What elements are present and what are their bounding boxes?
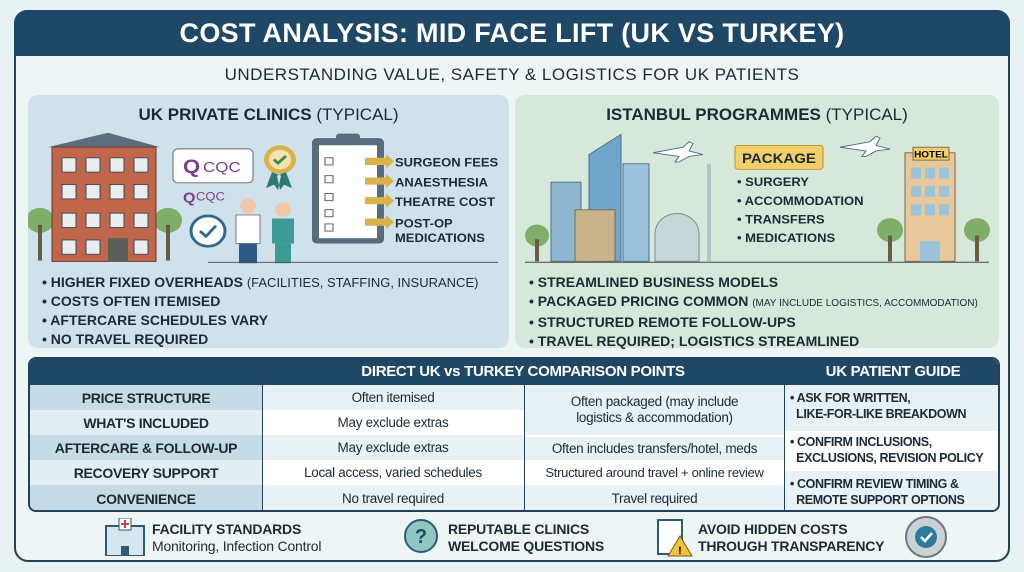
illustration: UK clinic building, CQC, staff, checklist: THEATRE COST (395, 196, 496, 209)
comparison table: EXCLUSIONS, REVISION POLICY (796, 451, 983, 465)
bullets: UK: NO TRAVEL REQUIRED (51, 331, 208, 347)
comparison table: DIRECT UK vs TURKEY COMPARISON POINTS (361, 363, 685, 380)
comparison table: RECOVERY SUPPORT (74, 464, 218, 480)
comparison table: WHAT'S INCLUDED (83, 414, 209, 430)
icon: clipboard warning: ! (678, 545, 682, 557)
icon: certified seal (905, 516, 947, 558)
footer: reputable clinics: REPUTABLE CLINICS (448, 521, 589, 537)
comparison table: May exclude extras (338, 414, 448, 430)
comparison table: Structured around travel + online review (545, 464, 764, 480)
footer: avoid hidden costs (657, 516, 947, 558)
bullets: UK: HIGHER FIXED OVERHEADS (FACILITIES, STAFFING, INSURANCE) (51, 274, 478, 290)
illustration: UK clinic building, CQC, staff, checklist: Q (183, 156, 200, 178)
comparison table: PRICE STRUCTURE (82, 390, 210, 406)
comparison table: Travel required (612, 490, 697, 506)
illustration: city skyline, package, hotel, planes: HOTEL (914, 150, 948, 160)
comparison table: No travel required (342, 490, 444, 506)
comparison table (28, 357, 1000, 512)
comparison table: May exclude extras (338, 440, 448, 454)
comparison table: AFTERCARE & FOLLOW-UP (55, 440, 237, 456)
comparison table: Often includes transfers/hotel, meds (552, 440, 757, 456)
comparison table: CONVENIENCE (96, 490, 196, 506)
bullets: Istanbul: TRAVEL REQUIRED; LOGISTICS STREAMLINED (538, 333, 859, 349)
illustration: UK clinic building, CQC, staff, checklist: CQC (196, 190, 225, 204)
footer: facility standards (105, 518, 321, 556)
bullets: UK (42, 274, 478, 347)
heading: UK: UK PRIVATE CLINICS (TYPICAL) (138, 105, 399, 124)
bullets: UK: COSTS OFTEN ITEMISED (51, 293, 220, 309)
footer: reputable clinics (404, 519, 604, 554)
illustration: UK clinic building, CQC, staff, checklist: CQC (203, 159, 241, 176)
illustration: city skyline, package, hotel, planes (525, 134, 990, 263)
footer: reputable clinics: WELCOME QUESTIONS (448, 538, 604, 554)
table header (30, 359, 1002, 385)
illustration: UK clinic building, CQC, staff, checklist (28, 132, 498, 264)
illustration: city skyline, package, hotel, planes: • ACCOMMODATION (737, 195, 864, 208)
bullets: Istanbul: PACKAGED PRICING COMMON (MAY INCLUDE LOGISTICS, ACCOMMODATION) (538, 293, 978, 309)
subtitle: UNDERSTANDING VALUE, SAFETY & LOGISTICS FOR UK PATIENTS (225, 65, 799, 84)
row labels (30, 385, 262, 514)
footer: facility standards: FACILITY STANDARDS (152, 521, 301, 537)
footer: facility standards: Monitoring, Infection Control (152, 538, 321, 554)
illustration: UK clinic building, CQC, staff, checklist: POST-OP (395, 217, 453, 230)
footer: avoid hidden costs: THROUGH TRANSPARENCY (698, 538, 884, 554)
title (14, 10, 1010, 56)
bullets: Istanbul: STREAMLINED BUSINESS MODELS (538, 274, 778, 290)
icon: hospital (105, 518, 145, 556)
comparison table: • CONFIRM INCLUSIONS, (790, 435, 932, 449)
Turkey column: logistics & accommodation) (576, 410, 733, 425)
panel: Istanbul programmes (515, 95, 999, 348)
bullets: Istanbul: STRUCTURED REMOTE FOLLOW-UPS (538, 314, 796, 330)
comparison table: • ASK FOR WRITTEN, (790, 391, 910, 405)
footer: avoid hidden costs: AVOID HIDDEN COSTS (698, 521, 847, 537)
UK column: Often itemised (352, 390, 434, 404)
icon: question bubble: ? (415, 526, 427, 548)
illustration: UK clinic building, CQC, staff, checklist: MEDICATIONS (395, 231, 485, 245)
title: COST ANALYSIS: MID FACE LIFT (UK VS TURKEY) (180, 18, 844, 48)
illustration: city skyline, package, hotel, planes: • TRANSFERS (737, 213, 825, 226)
patient guide (784, 385, 1002, 514)
illustration: city skyline, package, hotel, planes: • MEDICATIONS (737, 231, 835, 245)
panel: UK private clinics (28, 95, 509, 348)
UK column (262, 385, 524, 410)
comparison table: UK PATIENT GUIDE (826, 363, 960, 380)
bullets: UK: AFTERCARE SCHEDULES VARY (50, 312, 268, 328)
Turkey column: Often packaged (may include (571, 394, 738, 409)
bullets: Istanbul (530, 274, 978, 349)
illustration: UK clinic building, CQC, staff, checklist: ANAESTHESIA (395, 176, 488, 189)
icon: clipboard warning (657, 519, 693, 557)
heading: Istanbul: ISTANBUL PROGRAMMES (TYPICAL) (606, 105, 908, 124)
illustration: UK clinic building, CQC, staff, checklist: SURGEON FEES (395, 156, 498, 170)
comparison table: Local access, varied schedules (304, 464, 482, 480)
illustration: city skyline, package, hotel, planes: PACKAGE (742, 151, 816, 167)
comparison table: REMOTE SUPPORT OPTIONS (796, 493, 964, 507)
illustration: city skyline, package, hotel, planes: • SURGERY (737, 175, 810, 189)
icon: question bubble (404, 519, 438, 553)
illustration: UK clinic building, CQC, staff, checklist: Q (183, 190, 196, 206)
comparison table: LIKE-FOR-LIKE BREAKDOWN (796, 407, 966, 421)
Turkey column (525, 385, 784, 435)
comparison table: • CONFIRM REVIEW TIMING & (790, 477, 959, 491)
